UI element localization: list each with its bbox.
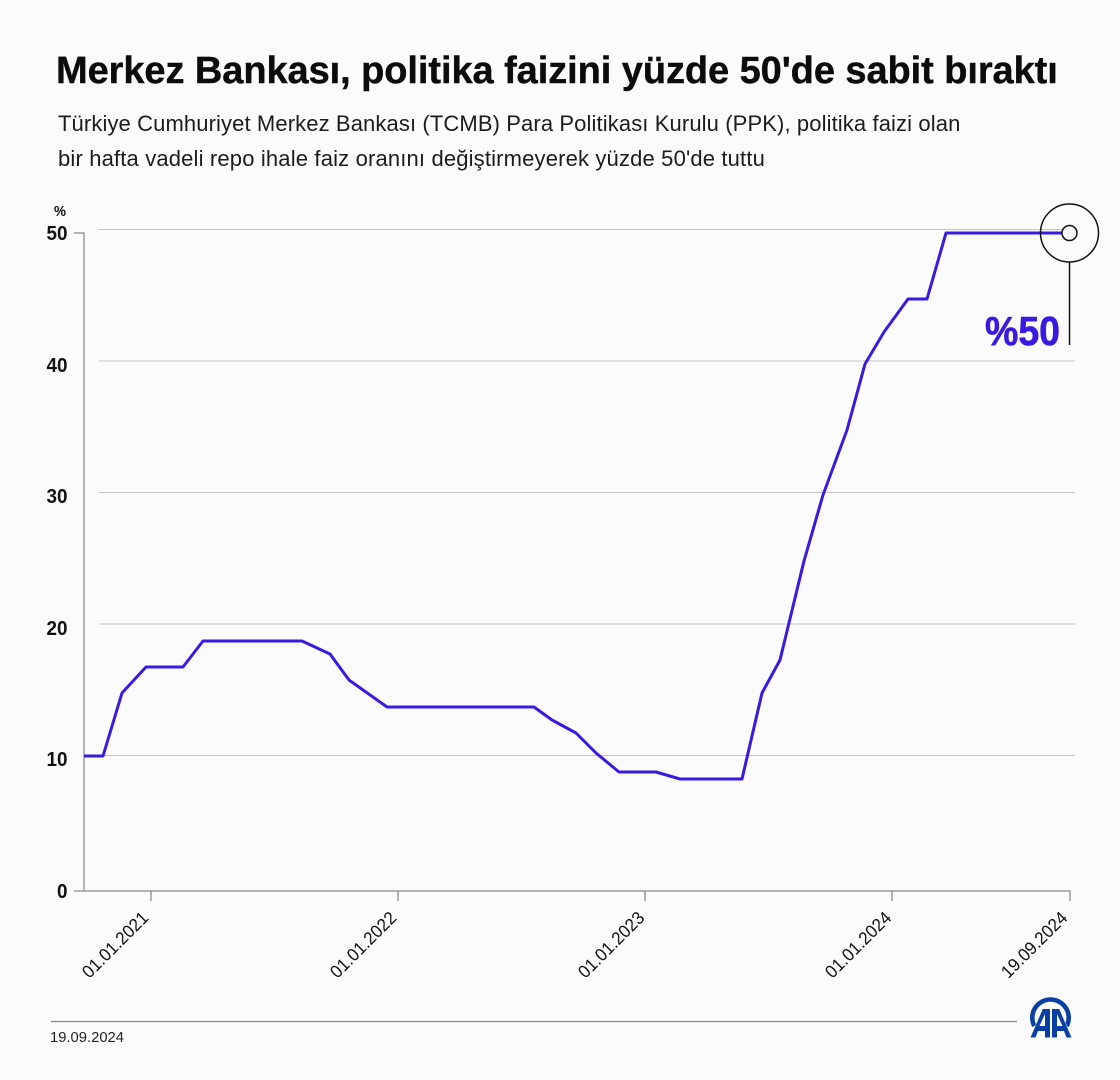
- y axis labels: 0: [57, 881, 68, 903]
- y axis labels: 30: [46, 486, 68, 508]
- icon: AA logo: [1030, 1000, 1072, 1038]
- callout value: %50: [985, 308, 1060, 354]
- y axis labels: 40: [46, 355, 68, 377]
- y axis labels: 50: [46, 223, 68, 245]
- y axis labels: 10: [46, 749, 68, 771]
- x axis labels: 01.01.2021: [78, 908, 152, 982]
- x axis labels: 01.01.2022: [326, 908, 400, 982]
- y axis labels: [46, 203, 68, 903]
- date: 19.09.2024: [50, 1030, 124, 1046]
- subtitle: bir hafta vadeli repo ihale faiz oranını değiştirmeyerek yüzde 50'de tuttu: [58, 146, 765, 171]
- data line: policy rate: [84, 233, 1062, 779]
- y axis labels: 20: [46, 618, 68, 640]
- y axis labels: %: [54, 203, 66, 220]
- x axis labels: 01.01.2024: [821, 908, 895, 982]
- subtitle: [58, 110, 960, 171]
- title: Merkez Bankası, politika faizini yüzde 50'de sabit bıraktı: [56, 50, 1058, 92]
- axes and ticks: [74, 233, 1070, 901]
- x axis labels: [78, 908, 1071, 982]
- end point marker: [1040, 204, 1098, 345]
- subtitle: Türkiye Cumhuriyet Merkez Bankası (TCMB) Para Politikası Kurulu (PPK), politika faizi olan: [58, 110, 960, 136]
- footer rule: [51, 1020, 1017, 1022]
- grid lines: [99, 230, 1075, 756]
- x axis labels: 19.09.2024: [997, 908, 1071, 982]
- x axis labels: 01.01.2023: [574, 908, 648, 982]
